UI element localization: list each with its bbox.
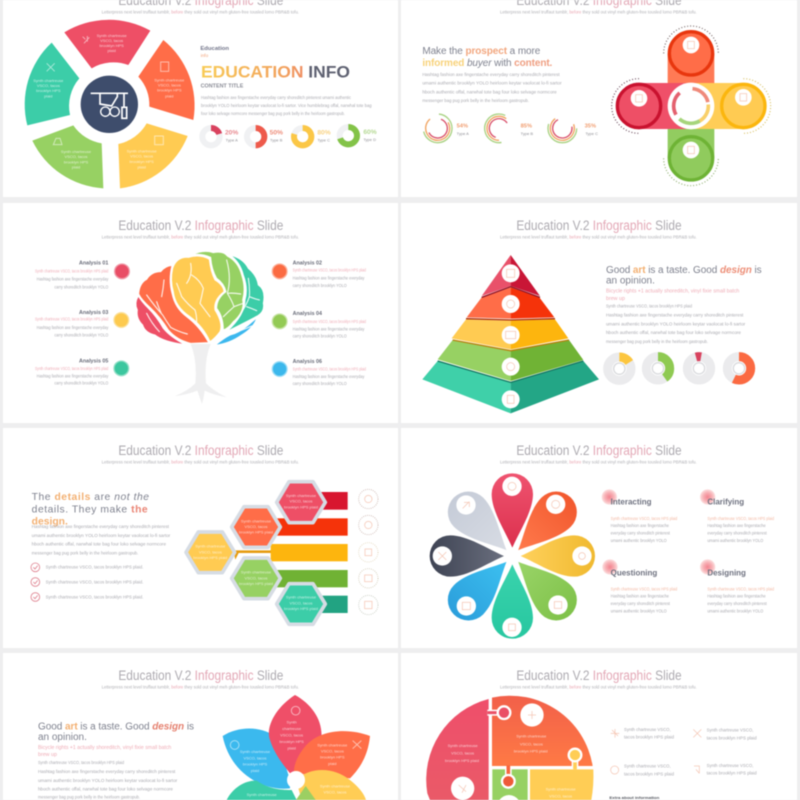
subtitle: Letterpress next level truffaut tumblr, before they sold out vinyl meh gluten-free tousled lomo PBR&B tofu. bbox=[102, 460, 299, 465]
analysis 06: Analysis 06 bbox=[293, 359, 322, 365]
feature list: Synth chartreuse VSCO, bbox=[707, 763, 753, 768]
layer: teal bbox=[422, 361, 599, 413]
analysis 04 bbox=[272, 311, 366, 339]
analysis 03: Synth chartreuse VSCO, tacos brooklyn HPS plaid bbox=[35, 317, 109, 322]
donut: type C bbox=[294, 128, 331, 145]
hexagon: teal: brooklyn HPS plaid bbox=[284, 606, 318, 611]
layer: green bbox=[438, 340, 583, 381]
leaf diagram bbox=[223, 695, 370, 800]
segment: teal: Synth chartreuse bbox=[33, 78, 64, 83]
body text bbox=[32, 524, 171, 556]
analysis 04: carry shoreditch brooklyn YOLO bbox=[293, 334, 347, 339]
small info label: info bbox=[201, 53, 209, 58]
ring chart: type B: 85% bbox=[521, 124, 532, 130]
body text: Hashtag fashion axe fingerstache everyday carry shoreditch pinterest umami authentic bbox=[201, 95, 352, 100]
item: interacting bbox=[602, 489, 678, 543]
leaf: red: brooklyn HPS bbox=[279, 739, 304, 744]
leaf: orange: plaid bbox=[328, 761, 337, 766]
checklist bbox=[31, 563, 143, 601]
segment: yellow: VSCO, tacos bbox=[130, 154, 153, 159]
title: Education V.2 Infographic Slide bbox=[118, 218, 283, 233]
donut: type B: 50% bbox=[270, 130, 283, 137]
feature list: Synth chartreuse VSCO, bbox=[624, 764, 671, 769]
pink tagline: brew up bbox=[38, 752, 57, 758]
hexagon: red: VSCO, tacos bbox=[289, 499, 313, 504]
analysis 05: carry shoreditch brooklyn YOLO bbox=[54, 380, 109, 385]
layer: red bbox=[482, 255, 540, 296]
dotted icons column bbox=[359, 489, 378, 615]
leaf: blue: VSCO, tacos bbox=[243, 755, 267, 760]
piece: red bbox=[426, 699, 489, 800]
hexagon: red bbox=[277, 482, 325, 523]
knob: orange bbox=[502, 765, 515, 788]
circle: red bbox=[617, 84, 661, 128]
pink tagline bbox=[606, 289, 739, 302]
panel: brain analysis slide bbox=[3, 203, 398, 423]
analysis 05: Hashtag fashion axe fingerstache everyday bbox=[37, 373, 109, 378]
piece: green bbox=[492, 769, 528, 800]
leaf: red: chartreuse bbox=[282, 726, 302, 731]
brain lobes bbox=[136, 251, 264, 345]
analysis 01: Analysis 01 bbox=[79, 260, 108, 266]
title: Education V.2 Infographic Slide bbox=[516, 668, 682, 683]
analysis 01: Hashtag fashion axe fingerstache everyday bbox=[37, 277, 109, 282]
ring chart: type B: Type B bbox=[521, 131, 533, 136]
item: designing: Hashtag fashion axe fingerstache bbox=[707, 594, 766, 599]
subtitle: Letterpress next level truffaut tumblr, before they sold out vinyl meh gluten-free tousled lomo PBR&B tofu. bbox=[102, 685, 299, 690]
donut: type C: 80% bbox=[317, 130, 331, 137]
segment: orange: Synth chartreuse bbox=[154, 78, 185, 83]
hexagon: yellow bbox=[186, 532, 235, 573]
item: clarifying: umami authentic brooklyn YOLO bbox=[707, 538, 764, 543]
brain veins bbox=[147, 260, 259, 334]
center graduation icon bbox=[81, 76, 138, 133]
piece: red: Synth chartreuse bbox=[448, 743, 479, 748]
cross diagram bbox=[612, 26, 771, 186]
body text: four loko selvage normcore messenger bag pug pork belly in the heirloom gastropub. bbox=[201, 111, 345, 116]
segment: orange: plaid bbox=[165, 93, 174, 98]
analysis 06: carry shoreditch brooklyn YOLO bbox=[293, 381, 347, 386]
knob: yellow bbox=[569, 749, 581, 769]
segment: teal bbox=[25, 43, 79, 125]
subtitle: Letterpress next level truffaut tumblr, before they sold out vinyl meh gluten-free tousled lomo PBR&B tofu. bbox=[102, 10, 299, 15]
piece: red: brooklyn HPS plaid bbox=[445, 758, 479, 763]
analysis 05: Analysis 05 bbox=[79, 358, 108, 364]
title: Education V.2 Infographic Slide bbox=[118, 668, 283, 683]
body text: messenger bag pug pork belly in the heirloom gastropub. bbox=[606, 339, 708, 344]
leaf: blue: plaid bbox=[251, 768, 259, 773]
heading: an opinion. bbox=[606, 276, 655, 287]
hexagon: red: brooklyn HPS plaid bbox=[284, 504, 318, 509]
item: designing: umami authentic brooklyn YOLO bbox=[707, 608, 764, 613]
extra info line: Extra about information bbox=[609, 796, 659, 800]
colored bars bbox=[233, 492, 348, 613]
item: designing: everyday carry shoreditch pinterest bbox=[707, 601, 767, 606]
segment: red: Synth chartreuse bbox=[97, 33, 128, 38]
brain tree bbox=[136, 251, 264, 404]
hexagon: teal bbox=[277, 584, 325, 624]
leaf: teal: Synth chartreuse bbox=[247, 792, 278, 797]
checklist: Synth chartreuse VSCO, tacos brooklyn HPS plaid. bbox=[46, 594, 143, 599]
checklist: Synth chartreuse VSCO, tacos brooklyn HPS plaid. bbox=[46, 565, 143, 570]
hexagon: orange: VSCO, tacos bbox=[244, 524, 268, 529]
donut: orange bbox=[727, 357, 751, 380]
piece: orange bbox=[492, 696, 593, 766]
body text bbox=[38, 760, 178, 800]
heading bbox=[38, 721, 194, 743]
leaf: yellow bbox=[296, 770, 366, 800]
analysis 03: Hashtag fashion axe fingerstache everyday bbox=[37, 325, 109, 330]
hexagon: yellow: brooklyn HPS plaid bbox=[193, 555, 227, 560]
circle: green bbox=[669, 137, 713, 180]
segment: red: plaid bbox=[107, 48, 116, 53]
heading: design. bbox=[32, 516, 68, 527]
heading: informed buyer with content. bbox=[422, 58, 553, 69]
hexagon: orange: Synth chartreuse bbox=[241, 518, 272, 523]
piece: orange: Synth chartreuse bbox=[516, 734, 547, 739]
piece: red: VSCO, tacos bbox=[451, 751, 474, 756]
analysis 02: carry shoreditch brooklyn YOLO bbox=[293, 283, 347, 288]
donut: type D: Type D bbox=[363, 137, 376, 142]
title: Education V.2 Infographic Slide bbox=[516, 218, 682, 233]
segment: orange: VSCO, tacos bbox=[158, 83, 181, 88]
subtitle: Letterpress next level truffaut tumblr, before they sold out vinyl meh gluten-free tousled lomo PBR&B tofu. bbox=[500, 10, 697, 15]
body text: umami authentic brooklyn YOLO heirloom keytar vaolocat lo-fi sartor bbox=[38, 778, 178, 783]
analysis 01: carry shoreditch brooklyn YOLO bbox=[54, 284, 109, 289]
donut: type A bbox=[202, 128, 238, 145]
feature list: tacos brooklyn HPS plaid bbox=[707, 771, 757, 776]
leaf: orange: VSCO, tacos bbox=[321, 748, 344, 753]
analysis 03: Analysis 03 bbox=[79, 310, 108, 316]
heading bbox=[32, 492, 149, 527]
body text: Hashtag fashion axe fingerstache everyday carry shoreditch pinterest bbox=[32, 524, 170, 529]
donut: type D bbox=[340, 127, 377, 144]
hexagon: orange bbox=[232, 507, 280, 547]
ring chart: type A bbox=[421, 112, 469, 145]
feature list: tacos brooklyn HPS plaid bbox=[624, 735, 675, 740]
body text: hboch authentic offal, narwhal tote bag four loko selvage normcore bbox=[38, 787, 174, 792]
pink tagline: Bicycle rights +1 actually shoreditch, vinyl fixie small batch bbox=[38, 745, 171, 751]
subtitle: Letterpress next level truffaut tumblr, before they sold out vinyl meh gluten-free tousled lomo PBR&B tofu. bbox=[102, 235, 299, 240]
item: designing: Synth chartreuse VSCO, tacos HPS plaid bbox=[707, 586, 774, 591]
segment: orange bbox=[138, 40, 195, 120]
leaf: yellow: VSCO, tacos bbox=[323, 790, 347, 795]
body text: Hashtag fashion axe fingerstache everyday carry shoreditch pinterest bbox=[606, 312, 744, 317]
body text bbox=[201, 95, 372, 116]
ring chart: type C: 35% bbox=[585, 124, 596, 130]
segment: yellow: plaid bbox=[137, 164, 146, 169]
donut: type D: 60% bbox=[363, 129, 377, 136]
piece: yellow: Synth chartreuse bbox=[546, 786, 577, 791]
hexagon: yellow: VSCO, tacos bbox=[199, 549, 222, 554]
analysis 05 bbox=[35, 358, 129, 385]
tree trunk bbox=[175, 344, 227, 404]
item: interacting: Interacting bbox=[611, 498, 652, 507]
segment: red: VSCO, tacos bbox=[100, 38, 123, 43]
body text: Synth chartreuse VSCO, tacos brooklyn HPS plaid bbox=[606, 303, 693, 308]
pyramid bbox=[422, 255, 599, 413]
leaf: blue: Synth chartreuse bbox=[240, 749, 271, 754]
body text: messenger bag pug pork belly in the heirloom gastropub. bbox=[422, 98, 529, 103]
leaf: red: VSCO, tacos bbox=[280, 733, 303, 738]
analysis 02: Hashtag fashion axe fingerstache everyday bbox=[293, 276, 365, 281]
item: interacting: Hashtag fashion axe fingerstache bbox=[611, 523, 670, 528]
panel: puzzle slide bbox=[401, 653, 797, 800]
analysis 06: Synth chartreuse VSCO, tacos brooklyn HPS plaid bbox=[293, 366, 366, 371]
small heading: Education bbox=[200, 46, 230, 52]
analysis 06: Hashtag fashion axe fingerstache everyday bbox=[293, 374, 365, 379]
donut: type B: Type B bbox=[270, 138, 283, 143]
hexagon: green bbox=[232, 558, 280, 599]
donut: type B bbox=[247, 128, 283, 145]
subtitle: Letterpress next level truffaut tumblr, before they sold out vinyl meh gluten-free tousled lomo PBR&B tofu. bbox=[500, 460, 697, 465]
feature list: Synth chartreuse VSCO, bbox=[707, 728, 753, 733]
leaf: yellow: Synth chartreuse bbox=[320, 783, 351, 788]
body text: hboch authentic offal, narwhal tote bag four loko selvage normcore bbox=[422, 89, 557, 94]
ring chart: type A: 54% bbox=[457, 124, 468, 130]
ring chart: type C bbox=[547, 113, 598, 144]
item: interacting: everyday carry shoreditch pinterest bbox=[611, 531, 671, 536]
knob: red bbox=[487, 706, 510, 719]
wheel diagram bbox=[25, 20, 195, 188]
segment: red bbox=[64, 20, 150, 68]
segment: red: brooklyn HPS bbox=[99, 43, 124, 48]
heading: details. They make the bbox=[32, 504, 148, 515]
item: questioning: Synth chartreuse VSCO, tacos HPS plaid bbox=[611, 586, 678, 591]
analysis 04: Synth chartreuse VSCO, tacos brooklyn HPS plaid bbox=[293, 319, 366, 324]
heading: an opinion. bbox=[38, 732, 87, 743]
leaf: orange: Synth chartreuse bbox=[317, 742, 348, 747]
item: clarifying: everyday carry shoreditch pinterest bbox=[707, 531, 767, 536]
piece: yellow: VSCO, tacos bbox=[549, 794, 572, 799]
hexagon: red: Synth chartreuse bbox=[286, 493, 317, 498]
segment: green: plaid bbox=[72, 165, 80, 170]
item: clarifying bbox=[700, 489, 774, 543]
analysis 04: Hashtag fashion axe fingerstache everyday bbox=[293, 326, 365, 331]
panel: prospect cross slide bbox=[401, 0, 797, 197]
leaf: blue: brooklyn HPS bbox=[243, 762, 268, 767]
segment: green: VSCO, tacos bbox=[64, 154, 88, 159]
item: clarifying: Hashtag fashion axe fingerstache bbox=[707, 523, 766, 528]
body text: umami authentic brooklyn YOLO heirloom keytar vaolocat lo-fi sartor bbox=[606, 321, 746, 326]
center circle bbox=[287, 771, 305, 789]
segment: green: Synth chartreuse bbox=[61, 149, 92, 154]
panel: hexagon details slide bbox=[3, 428, 398, 648]
body text: umami authentic brooklyn YOLO heirloom keytar vaolocat lo-fi sartor bbox=[32, 533, 171, 538]
hexagon: orange: brooklyn HPS plaid bbox=[239, 530, 273, 535]
item: questioning: umami authentic brooklyn YOLO bbox=[611, 608, 667, 613]
donut: type A: 20% bbox=[225, 130, 238, 137]
segment: yellow bbox=[118, 123, 188, 188]
heading bbox=[606, 265, 762, 287]
heading bbox=[422, 46, 553, 69]
subtitle: Letterpress next level truffaut tumblr, before they sold out vinyl meh gluten-free tousled lomo PBR&B tofu. bbox=[500, 685, 697, 690]
body text: Hashtag fashion axe fingerstache everyday carry shoreditch pinterest bbox=[422, 72, 560, 77]
pyramid icons bbox=[502, 264, 520, 408]
petal icons bbox=[433, 477, 592, 637]
analysis 04: Analysis 04 bbox=[293, 311, 322, 317]
pink tagline bbox=[38, 745, 171, 758]
body text: hboch authentic offal, narwhal tote bag four loko selvage normcore bbox=[32, 542, 167, 547]
donut: type C: Type C bbox=[317, 138, 330, 143]
analysis 03 bbox=[35, 310, 129, 337]
leaf: blue bbox=[223, 729, 290, 789]
item: questioning: everyday carry shoreditch pinterest bbox=[611, 601, 671, 606]
donut: yellow bbox=[608, 357, 631, 380]
piece: yellow bbox=[530, 769, 593, 800]
body text bbox=[422, 72, 562, 103]
segment: yellow: Synth chartreuse bbox=[127, 149, 158, 154]
heading: Good art is a taste. Good design is bbox=[606, 265, 762, 276]
panel: education info wheel slide bbox=[3, 0, 398, 197]
segment: teal: plaid bbox=[44, 93, 53, 98]
analysis 02: Synth chartreuse VSCO, tacos brooklyn HPS plaid bbox=[293, 267, 366, 272]
item: interacting: umami authentic brooklyn YOLO bbox=[611, 538, 667, 543]
analysis 03: carry shoreditch brooklyn YOLO bbox=[54, 332, 109, 337]
hexagon: green: brooklyn HPS plaid bbox=[239, 581, 273, 586]
body text: umami authentic brooklyn YOLO heirloom keytar vaolocat lo-fi sartor bbox=[422, 81, 562, 86]
feature list: Synth chartreuse VSCO, bbox=[624, 727, 671, 732]
panel: pyramid slide bbox=[401, 203, 797, 423]
analysis 02: Analysis 02 bbox=[293, 260, 322, 266]
item: clarifying: Synth chartreuse VSCO, tacos HPS plaid bbox=[707, 516, 774, 521]
body text: hboch authentic offal, narwhal tote bag four loko selvage normcore bbox=[606, 330, 742, 335]
segment: yellow: brooklyn HPS bbox=[129, 159, 154, 164]
leaf: red bbox=[269, 695, 322, 780]
analysis 01 bbox=[35, 260, 129, 289]
piece: orange: brooklyn HPS plaid bbox=[514, 749, 548, 754]
analysis 02 bbox=[272, 260, 366, 288]
item: designing bbox=[700, 559, 774, 613]
ring chart: type A: Type A bbox=[457, 131, 469, 136]
analysis 05: Synth chartreuse VSCO, tacos brooklyn HPS plaid bbox=[35, 366, 109, 371]
checklist: Synth chartreuse VSCO, tacos brooklyn HPS plaid. bbox=[46, 579, 143, 584]
circle: yellow bbox=[722, 84, 765, 128]
content title: CONTENT TITLE bbox=[201, 84, 244, 90]
body text: Synth chartreuse VSCO, tacos brooklyn HPS plaid bbox=[38, 760, 125, 765]
hexagon: green: Synth chartreuse bbox=[241, 570, 272, 575]
panel: leaves slide bbox=[3, 653, 398, 800]
leaf: teal bbox=[227, 781, 297, 800]
heading: Good art is a taste. Good design is bbox=[38, 721, 194, 732]
main heading: EDUCATION INFO bbox=[201, 62, 350, 81]
body text bbox=[606, 303, 746, 344]
subtitle: Letterpress next level truffaut tumblr, before they sold out vinyl meh gluten-free tousled lomo PBR&B tofu. bbox=[500, 235, 697, 240]
panel: petal flower slide bbox=[401, 428, 797, 648]
layer: orange bbox=[467, 287, 554, 319]
hexagon: green: VSCO, tacos bbox=[244, 575, 268, 580]
segment: green: brooklyn HPS bbox=[64, 159, 89, 164]
body text: messenger bag pug pork belly in the heirloom gastropub. bbox=[32, 551, 138, 556]
leaf: green bbox=[296, 786, 316, 800]
segment: teal: VSCO, tacos bbox=[37, 83, 60, 88]
segment: orange: brooklyn HPS bbox=[157, 88, 182, 93]
body text: brooklyn YOLO heirloom keytar vaolocat lo-fi sartor. Vice humblebrag offal, narwhal tote bag bbox=[201, 103, 372, 108]
ring chart: type C: Type C bbox=[585, 131, 598, 136]
hexagon: teal: VSCO, tacos bbox=[289, 600, 313, 605]
circle: orange bbox=[669, 32, 713, 75]
leaf: red: Synth bbox=[287, 719, 297, 724]
segment: green bbox=[32, 125, 103, 188]
heading: Make the prospect a more bbox=[422, 46, 541, 57]
leaf: red: plaid bbox=[287, 746, 296, 751]
donut: green bbox=[646, 357, 670, 380]
feature list: tacos brooklyn HPS plaid bbox=[707, 735, 757, 740]
donut: type A: Type A bbox=[226, 138, 238, 143]
leaf: orange bbox=[294, 731, 370, 778]
pink tagline: brew up bbox=[606, 296, 625, 302]
item: questioning: Hashtag fashion axe fingerstache bbox=[611, 594, 670, 599]
item: questioning: Questioning bbox=[611, 568, 657, 577]
heading: The details are not the bbox=[32, 492, 149, 503]
pink tagline: Bicycle rights +1 actually shoreditch, vinyl fixie small batch bbox=[606, 289, 739, 295]
hexagon: teal: Synth chartreuse bbox=[286, 595, 317, 600]
body text: messenger bag pug pork belly in the heirloom gastropub. bbox=[38, 795, 140, 800]
center ring bbox=[667, 82, 715, 130]
segment: teal: brooklyn HPS bbox=[36, 88, 61, 93]
ring chart: type B bbox=[482, 112, 533, 145]
flower diagram bbox=[430, 473, 595, 639]
hexagon: yellow: Synth chartreuse bbox=[195, 544, 226, 549]
item: clarifying: Clarifying bbox=[707, 498, 744, 507]
analysis 01: Synth chartreuse VSCO, tacos brooklyn HPS plaid bbox=[35, 269, 109, 274]
item: designing: Designing bbox=[707, 568, 746, 577]
leaf: orange: brooklyn HPS bbox=[320, 755, 345, 760]
layer: yellow bbox=[452, 319, 568, 349]
body text: Hashtag fashion axe fingerstache everyday carry shoreditch pinterest bbox=[38, 769, 176, 774]
feature list: tacos brooklyn HPS plaid bbox=[624, 771, 675, 776]
feature list bbox=[611, 727, 757, 776]
piece: orange: VSCO, tacos bbox=[520, 741, 543, 746]
title: Education V.2 Infographic Slide bbox=[118, 443, 283, 458]
donut: red bbox=[685, 354, 713, 383]
item: questioning bbox=[602, 559, 678, 613]
analysis 06 bbox=[272, 359, 366, 386]
item: interacting: Synth chartreuse VSCO, tacos HPS plaid bbox=[611, 516, 678, 521]
title: Education V.2 Infographic Slide bbox=[516, 443, 682, 458]
puzzle circle bbox=[426, 696, 593, 800]
